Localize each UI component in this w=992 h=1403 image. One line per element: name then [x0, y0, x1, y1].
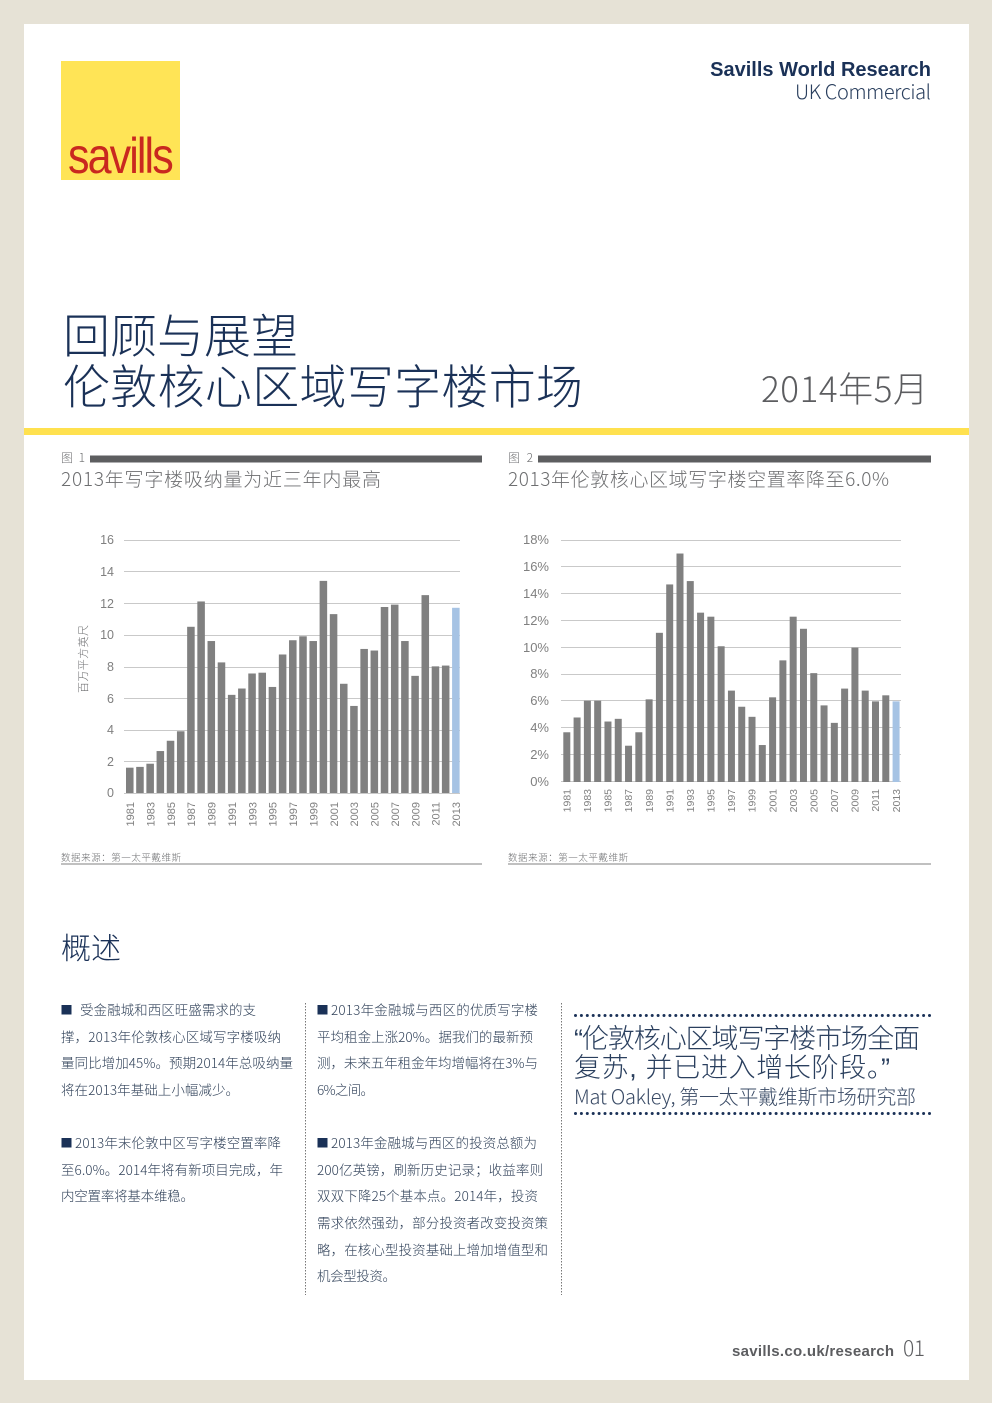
panel: figure 2 heading: 2013年伦敦核心区域写字楼空置率降至6.0% — [508, 465, 889, 492]
callout: quote: “伦敦核心区域写字楼市场全面 — [574, 1024, 920, 1054]
panel: figure 2 heading: 图 2 — [508, 449, 533, 466]
bar chart: figure 1 take-up: 2007 — [390, 802, 402, 826]
bar chart: figure 1 take-up: 1985 — [166, 802, 178, 826]
panel: figure 1 heading — [61, 449, 482, 492]
bar chart: figure 2 vacancy: 16% — [523, 559, 549, 574]
bar chart: figure 2 vacancy: 4% — [530, 720, 549, 735]
bar chart: figure 2 vacancy: 1989 — [644, 789, 656, 812]
bar chart: figure 2 vacancy: 10% — [523, 640, 549, 655]
bar chart: figure 1 take-up: 1989 — [206, 802, 218, 826]
bar chart: figure 1 take-up: 1991 — [227, 802, 239, 826]
header: research label: Savills World Research — [710, 59, 931, 81]
text column 2 — [317, 999, 548, 1285]
panel: figure 1 heading: 图 1 — [61, 449, 85, 466]
bar chart: figure 2 vacancy: 1983 — [582, 789, 594, 812]
bar chart: figure 2 vacancy: 2003 — [788, 789, 800, 812]
footer: website and page number: 01 — [903, 1333, 925, 1363]
bar chart: figure 1 take-up: 6 — [107, 692, 114, 706]
bar chart: figure 1 take-up: 2 — [107, 755, 114, 769]
bullet paragraph: investment: 机会型投资。 — [317, 1265, 396, 1285]
bar chart: figure 1 take-up: 2011 — [431, 802, 443, 826]
bar chart: figure 2 vacancy: 1995 — [706, 789, 718, 812]
panel: figure 1 heading: 2013年写字楼吸纳量为近三年内最高 — [61, 465, 381, 492]
bullet paragraph: take-up: 受金融城和西区旺盛需求的支 — [80, 999, 256, 1019]
bar chart: figure 1 take-up: 1995 — [268, 802, 280, 826]
bullet paragraph: vacancy — [61, 1132, 283, 1205]
bullet paragraph: investment: 需求依然强劲，部分投资者改变投资策 — [317, 1212, 548, 1232]
bar chart: figure 2 vacancy: 2013 — [891, 789, 903, 812]
bar chart: figure 2 vacancy — [523, 532, 903, 812]
footer: website and page number: savills.co.uk/research — [732, 1343, 894, 1360]
bar chart: figure 2 vacancy: 2007 — [829, 789, 841, 812]
bar chart: figure 2 vacancy: 6% — [530, 693, 549, 708]
footer: website and page number — [732, 1333, 925, 1363]
bullet paragraph: vacancy: 内空置率将基本维稳。 — [61, 1185, 194, 1205]
bullet paragraph: investment: 2013年金融城与西区的投资总额为 — [331, 1132, 537, 1152]
text column 1 — [61, 999, 293, 1205]
bullet paragraph: investment: 双双下降25个基本点。2014年，投资 — [317, 1185, 538, 1205]
bar chart: figure 1 take-up: 1983 — [145, 802, 157, 826]
source note: figure 2: 数据来源：第一太平戴维斯 — [508, 850, 628, 864]
bar chart: figure 2 vacancy: 1985 — [603, 789, 615, 812]
callout: quote: 复苏, 并已进入增长阶段。” — [574, 1053, 890, 1083]
bar chart: figure 2 vacancy: 1997 — [726, 789, 738, 812]
bar chart: figure 2 vacancy: 8% — [530, 666, 549, 681]
bar chart: figure 1 take-up: 2009 — [410, 802, 422, 826]
bar chart: figure 1 take-up: 0 — [107, 786, 114, 800]
bar chart: figure 2 vacancy: 18% — [523, 532, 549, 547]
bar chart: figure 1 take-up: 2005 — [370, 802, 382, 826]
bullet paragraph: take-up: 将在2013年基础上小幅减少。 — [61, 1079, 239, 1099]
heading: overview: 概述 — [61, 933, 121, 966]
bullet paragraph: rents: 6%之间。 — [317, 1079, 374, 1099]
bar chart: figure 1 take-up: 1997 — [288, 802, 300, 826]
header: research label — [710, 59, 931, 105]
title: 回顾与展望 — [63, 310, 298, 363]
bar chart: figure 1 take-up: 百万平方英尺 — [75, 625, 91, 693]
bar chart: figure 1 take-up — [75, 533, 463, 826]
bar chart: figure 1 take-up: 8 — [107, 660, 114, 674]
logo: savills — [61, 61, 180, 184]
bar chart: figure 2 vacancy: 1993 — [685, 789, 697, 812]
callout: quote — [574, 1016, 930, 1114]
bullet paragraph: rents — [317, 999, 538, 1099]
bullet paragraph: investment: 200亿英镑，刷新历史记录；收益率则 — [317, 1159, 543, 1179]
bar chart: figure 2 vacancy: 2% — [530, 747, 549, 762]
bar chart: figure 2 vacancy: 12% — [523, 613, 549, 628]
panel: figure 2 heading — [508, 449, 931, 492]
bullet paragraph: rents: 测，未来五年租金年均增幅将在3%与 — [317, 1052, 538, 1072]
yellow divider — [24, 428, 969, 435]
bar chart: figure 1 take-up: 10 — [100, 628, 114, 642]
bar chart: figure 1 take-up: 2001 — [329, 802, 341, 826]
bar chart: figure 1 take-up: 1993 — [247, 802, 259, 826]
callout: quote: Mat Oakley, 第一太平戴维斯市场研究部 — [574, 1081, 916, 1110]
logo: savills: savills — [68, 128, 172, 184]
bar chart: figure 2 vacancy: 1987 — [623, 789, 635, 812]
bar chart: figure 1 take-up: 1981 — [125, 802, 137, 826]
bar chart: figure 1 take-up: 2013 — [451, 802, 463, 826]
title — [63, 310, 583, 414]
date: 2014年5月 — [761, 362, 928, 413]
bar chart: figure 1 take-up: 1987 — [186, 802, 198, 826]
bar chart: figure 1 take-up: 4 — [107, 723, 114, 737]
bar chart: figure 1 take-up: 1999 — [308, 802, 320, 826]
bullet paragraph: investment — [317, 1132, 548, 1285]
bullet paragraph: investment: 略，在核心型投资基础上增加增值型和 — [317, 1239, 548, 1259]
bar chart: figure 1 take-up: 2003 — [349, 802, 361, 826]
bar chart: figure 2 vacancy: 2011 — [870, 789, 882, 812]
bullet paragraph: vacancy: 2013年末伦敦中区写字楼空置率降 — [75, 1132, 281, 1152]
bullet paragraph: rents: 2013年金融城与西区的优质写字楼 — [331, 999, 538, 1019]
bar chart: figure 1 take-up: 12 — [100, 597, 114, 611]
bar chart: figure 1 take-up: 16 — [100, 533, 114, 547]
bar chart: figure 2 vacancy: 2005 — [808, 789, 820, 812]
header: research label: UK Commercial — [795, 76, 931, 105]
bullet paragraph: vacancy: 至6.0%。2014年将有新项目完成，年 — [61, 1159, 283, 1179]
bar chart: figure 2 vacancy: 2001 — [767, 789, 779, 812]
bar chart: figure 1 take-up: 14 — [100, 565, 114, 579]
bar chart: figure 2 vacancy: 14% — [523, 586, 549, 601]
bullet paragraph: take-up — [61, 999, 293, 1099]
bullet paragraph: take-up: 量同比增加45%。预期2014年总吸纳量 — [61, 1052, 293, 1072]
bar chart: figure 2 vacancy: 1999 — [747, 789, 759, 812]
bullet paragraph: rents: 平均租金上涨20%。据我们的最新预 — [317, 1026, 533, 1046]
title: 伦敦核心区域写字楼市场 — [63, 361, 583, 414]
bar chart: figure 2 vacancy: 1991 — [664, 789, 676, 812]
bar chart: figure 2 vacancy: 1981 — [562, 789, 574, 812]
bar chart: figure 2 vacancy: 0% — [530, 774, 549, 789]
bullet paragraph: take-up: 撑，2013年伦敦核心区域写字楼吸纳 — [61, 1026, 281, 1046]
bar chart: figure 2 vacancy: 2009 — [850, 789, 862, 812]
source note: figure 1: 数据来源：第一太平戴维斯 — [61, 850, 181, 864]
